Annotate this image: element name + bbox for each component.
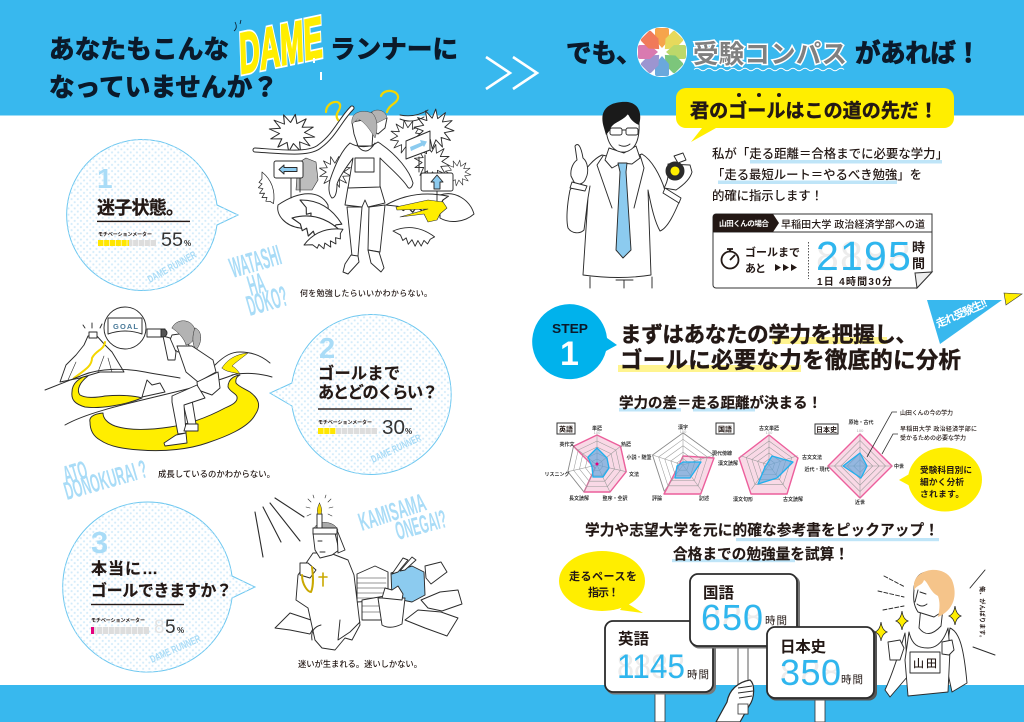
motivation meter 5: 5 — [165, 617, 176, 638]
jungle leaves — [253, 107, 474, 256]
countdown card: あと — [745, 262, 766, 275]
sign: left arrow — [274, 161, 303, 198]
radar chart: Japanese history: 原始・古代 — [848, 419, 874, 426]
books stack — [357, 566, 388, 620]
sign: Japanese hours: 888 — [701, 597, 763, 638]
step bubble 1: lost — [67, 140, 238, 290]
radar chart: Japanese history: 近世 — [855, 499, 865, 506]
radar chart: Japanese classics: 100 — [766, 430, 773, 435]
radar chart: Japanese classics: 国語 — [718, 426, 732, 434]
handwritten label: WATASHI HA DOKO?: DOKO? — [243, 280, 291, 323]
radar chart: Japanese classics: 漢文句形 — [733, 496, 753, 503]
double chevron arrow — [486, 57, 537, 89]
sign: Japanese history hours: 時間 — [841, 674, 863, 686]
radar chart: English: 100 — [594, 430, 601, 435]
DAME logo word: DAME — [238, 4, 324, 87]
yellow oval: pace instruction: 走るペースを — [569, 570, 637, 583]
pennant flag with megaphone: 走れ受験生!! — [934, 296, 989, 331]
radar chart: English: 単語 — [592, 425, 602, 432]
step bubble 3: can I reach: 3 — [91, 525, 108, 560]
yellow road — [90, 375, 259, 451]
scope bubble: GOAL — [113, 322, 138, 331]
countdown card: 間 — [912, 256, 925, 271]
right title — [566, 27, 981, 77]
yellow callout: analysis by subject — [899, 448, 982, 512]
waste bin with paper — [378, 598, 405, 627]
sparkles — [875, 606, 961, 641]
sign: Japanese hours — [690, 574, 800, 714]
sign: Japanese history hours — [767, 627, 877, 722]
radar chart: Japanese classics: 古文文法 — [802, 454, 822, 461]
scope bubble — [104, 307, 165, 349]
text block: teacher explanation — [712, 146, 948, 203]
icon: compass flower logo — [637, 27, 687, 77]
step 1 badge — [532, 304, 617, 379]
step bubble 3: can I reach — [63, 502, 255, 672]
handwritten label: ATO DONOKURAI ? — [60, 454, 150, 506]
sign: English hours: 時間 — [687, 669, 709, 681]
icon: hand holding sign — [716, 680, 754, 722]
step bubble 2: how far: モチベーションメーター — [318, 419, 372, 426]
icon: stopwatch — [722, 249, 738, 268]
radar chart: Japanese classics — [716, 423, 822, 503]
motivation meter 5: 8 — [154, 617, 165, 638]
step bubble 2: how far: あとどのくらい？ — [318, 384, 438, 402]
step 1 badge: 1 — [560, 335, 579, 373]
radar chart: English: 熟語 — [621, 441, 631, 448]
sign: Japanese history hours: 888 — [780, 652, 841, 693]
sign: Japanese history hours: 日本史 — [780, 638, 826, 656]
motivation meter 5: % — [177, 626, 184, 635]
sign: up-right arrow — [406, 131, 430, 172]
left title: あなたもこんな — [49, 36, 229, 64]
illustration: teacher with stopwatch — [567, 102, 692, 288]
illustration: Yamada cheering — [878, 570, 995, 697]
radar chart: Japanese classics: 漢文読解 — [718, 460, 738, 467]
speech bubble: goal headline — [676, 88, 954, 142]
DAME logo word: DAME — [238, 4, 324, 87]
caption 3: 迷いが生まれる。迷いしかない。 — [298, 659, 422, 669]
radar chart: English — [544, 423, 639, 502]
sign: Japanese hours: 650 — [701, 597, 763, 638]
sign: English hours: 英語 — [618, 630, 649, 648]
Yamada speech text: 俺、がんばります。 — [978, 586, 986, 641]
illustration: woman looking through binoculars at goal — [45, 307, 272, 451]
radar chart: Japanese modern: 漢字 — [678, 424, 688, 431]
step bubble 1: lost: 迷子状態。 — [97, 197, 184, 218]
motivation meter 30: 30 — [382, 417, 405, 439]
hills — [45, 369, 180, 390]
handwritten label: WATASHI HA DOKO?: HA — [244, 267, 269, 303]
caption 2: 成長しているのかわからない。 — [158, 469, 275, 479]
radar chart: Japanese modern — [626, 424, 732, 502]
radar chart: Japanese modern: 100 — [680, 429, 687, 434]
step bubble 3: can I reach: ゴールできますか？ — [91, 581, 232, 600]
radar chart: Japanese history: 日本史 — [816, 425, 837, 434]
left title — [49, 4, 458, 102]
countdown card: 早稲田大学 政治経済学部への道 — [781, 218, 925, 231]
chart legend callouts: 山田くんの今の学力 — [900, 409, 953, 417]
sign: English hours: 1145 — [617, 648, 685, 686]
radar chart: English: リスニング — [544, 471, 570, 478]
right title: でも、 — [566, 40, 642, 68]
sign: English hours — [605, 621, 716, 722]
step bubble 1: lost: 1 — [97, 163, 113, 194]
sign: up arrow — [421, 173, 453, 205]
countdown card — [713, 214, 932, 288]
motivation meter 5 — [91, 617, 184, 638]
bear — [296, 158, 318, 190]
handwritten label: WATASHI HA DOKO?: WATASHI — [226, 239, 285, 285]
text block: study plan — [585, 521, 939, 563]
motivation meter 55: 55 — [161, 230, 183, 251]
open books — [421, 590, 462, 611]
sign: Japanese history hours: 350 — [780, 652, 841, 693]
text block: teacher explanation: 「走る最短ルート＝やるべき勉強」を — [712, 167, 922, 182]
yellow callout: analysis by subject: されます。 — [920, 489, 964, 499]
top blue band — [0, 0, 1024, 116]
text block: study plan: 合格までの勉強量を試算！ — [673, 545, 849, 563]
radar chart: English: 英語 — [559, 424, 573, 434]
step 1 heading — [618, 323, 961, 373]
left title: ランナーに — [330, 36, 458, 64]
step bubble 2: how far: ゴールまで — [318, 364, 400, 383]
radar chart: Japanese modern: 評論 — [652, 495, 662, 502]
step bubble 1: lost: モチベーションメーター — [98, 231, 152, 238]
kneeling person — [296, 553, 360, 650]
left title: なっていませんか？ — [49, 74, 278, 102]
countdown card: ゴールまで — [745, 245, 800, 259]
radar chart: English: 長文読解 — [569, 495, 589, 502]
chart legend callouts: 受かるための必要な学力 — [900, 434, 966, 442]
mountain — [60, 335, 124, 382]
sign: Japanese hours: 時間 — [765, 615, 787, 627]
yellow callout: analysis by subject: 細かく分析 — [920, 476, 964, 487]
runner — [329, 110, 413, 274]
radar chart: English: 英作文 — [559, 441, 575, 448]
radar chart: Japanese history — [804, 419, 904, 506]
caption 1: 何を勉強したらいいかわからない。 — [300, 288, 432, 298]
motivation meter 55: % — [184, 239, 191, 248]
radar chart: Japanese modern: 現代傍線 — [712, 450, 732, 457]
speech bubble: goal headline: 君のゴールはこの道の先だ！ — [690, 99, 938, 122]
countdown card: 山田くんの場合 — [719, 218, 769, 228]
step bubble 3: can I reach: モチベーションメーター — [91, 617, 145, 624]
step 1 heading: ゴールに必要な力を徹底的に分析 — [620, 347, 961, 373]
logo wordmark: 受験コンパス — [693, 41, 847, 69]
pennant flag with megaphone — [927, 293, 1022, 344]
countdown card: 2195 — [816, 233, 911, 279]
woman — [147, 321, 220, 446]
radar chart: English: 文法 — [629, 471, 639, 478]
backpack — [391, 566, 425, 602]
icon: megaphone — [1004, 293, 1022, 305]
radar section heading: 学力の差＝走る距離が決まる！ — [619, 394, 822, 412]
light rays — [255, 498, 304, 557]
step bubble 2: how far — [270, 315, 451, 475]
countdown card: 1日 4時間30分 — [817, 275, 892, 288]
motivation meter 55 — [98, 230, 191, 251]
motivation meter 30: % — [405, 427, 412, 436]
small book — [425, 562, 447, 584]
handwritten label: KAMISAMA ONEGAI?: KAMISAMA — [355, 487, 430, 537]
branch — [255, 108, 352, 152]
yellow callout: analysis by subject: 受験科目別に — [920, 464, 972, 475]
step bubble 3: can I reach: DAME RUNNER — [148, 633, 202, 665]
countdown card: 8888 — [816, 233, 911, 279]
bottom blue band — [0, 685, 1024, 722]
text block: teacher explanation: 的確に指示します！ — [712, 188, 823, 203]
text block: study plan: 学力や志望大学を元に的確な参考書をピックアップ！ — [585, 521, 939, 539]
radar chart: Japanese classics: 古文単語 — [759, 425, 779, 432]
illustration: praying student with books — [255, 495, 462, 650]
step bubble 2: how far: 2 — [319, 333, 335, 365]
radar chart: Japanese modern: 小説・随筆 — [626, 454, 652, 461]
step bubble 2: how far: DAME RUNNER — [369, 432, 423, 465]
step bubble 1: lost: DAME RUNNER — [146, 249, 199, 285]
countdown card: 時 — [912, 240, 925, 255]
text block: teacher explanation: 私が「走る距離＝合格までに必要な学力」 — [712, 146, 948, 161]
chart legend callouts: 早稲田大学 政治経済学部に — [900, 425, 977, 433]
yellow oval: pace instruction — [559, 551, 645, 613]
sign: English hours: 8888 — [617, 648, 685, 686]
radar chart: English: 整序・全訳 — [602, 495, 628, 502]
radar chart: Japanese classics: 古文読解 — [783, 496, 803, 503]
radar chart: Japanese history: 近代・現代 — [804, 466, 830, 473]
radar chart: Japanese modern: 記述 — [699, 495, 709, 502]
handwritten label: KAMISAMA ONEGAI?: ONEGAI? — [392, 504, 450, 546]
step 1 heading: まずはあなたの学力を把握し、 — [620, 323, 917, 347]
radar chart: Japanese history: 100 — [857, 428, 864, 433]
handwritten label: ATO DONOKURAI ?: ATO — [60, 455, 91, 490]
sign: Japanese hours: 国語 — [703, 584, 734, 602]
yellow oval: pace instruction: 指示！ — [588, 585, 619, 599]
radar chart: Japanese history: 中世 — [894, 463, 904, 470]
illustration: lost runner in jungle — [253, 91, 474, 274]
step bubble 3: can I reach: 本当に… — [91, 560, 158, 578]
illustration: Yamada cheering: 山田 — [913, 657, 937, 670]
right title: があれば！ — [855, 39, 981, 68]
yellow crocodile — [396, 200, 447, 222]
step 1 badge: STEP — [552, 321, 588, 336]
chart legend callouts — [867, 409, 977, 457]
question marks — [326, 91, 398, 120]
motivation meter 30 — [318, 417, 412, 439]
handwritten label: WATASHI HA DOKO? — [226, 239, 291, 323]
handwritten label: ATO DONOKURAI ?: DONOKURAI ? — [61, 454, 150, 506]
